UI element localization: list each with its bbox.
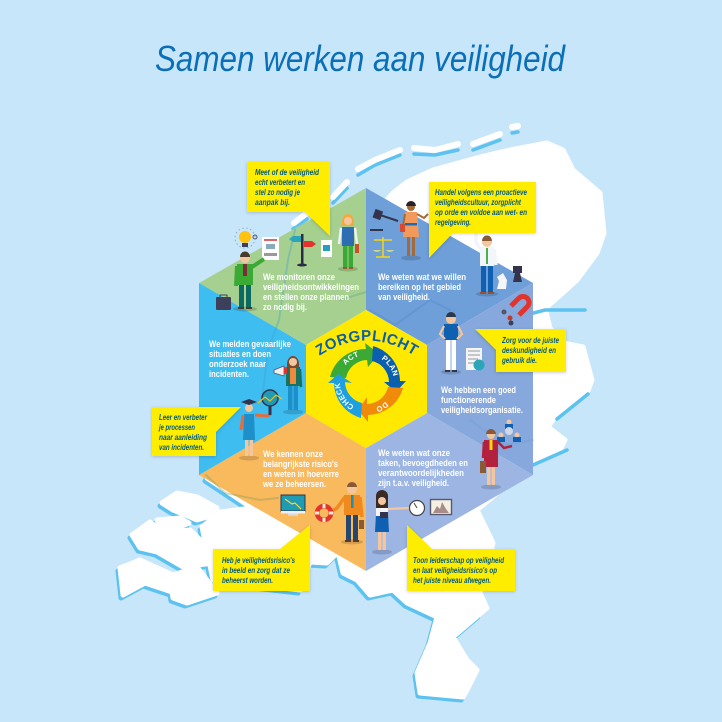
callout: expertise: deskundigheid en (502, 346, 556, 355)
labels on the cycle: PLAN (382, 355, 398, 376)
rivers seen through the hexagon (206, 230, 533, 500)
callout: measure: echt verbetert en (255, 178, 305, 187)
text: responsibilities: verantwoordelijkheden (378, 468, 464, 478)
text: responsibilities: zijn t.a.v. veiligheid. (378, 478, 449, 488)
text: responsibilities: taken, bevoegdheden en (378, 458, 468, 468)
person: man with glasses (440, 312, 462, 374)
labels on the cycle (334, 351, 398, 412)
person: graduate woman (239, 399, 271, 460)
labels on the cycle: ACT (343, 351, 358, 366)
icon: team (497, 420, 521, 442)
callout: expertise (475, 329, 566, 372)
callout: culture: op orde en voldoe aan wet- en (435, 208, 527, 217)
text: goals: van veiligheid. (378, 292, 430, 302)
icon: gauge (410, 500, 424, 516)
segment: responsibilities (lower blue) (366, 413, 533, 571)
callout: leadership: Toon leiderschap op veiligheid (413, 556, 505, 565)
text: organisation: veiligheidsorganisatie. (441, 405, 523, 415)
text: incidents: onderzoek naar (209, 359, 266, 369)
segment: organisation (right blue) (427, 283, 533, 475)
arrow: act (330, 343, 379, 378)
icons: gavel and scales (370, 209, 398, 257)
callout: risks: beheerst worden. (222, 576, 273, 585)
map of the Netherlands (118, 126, 604, 700)
callout: learn: van incidenten. (159, 443, 204, 452)
icon: megaphone (274, 366, 287, 376)
text: incidents: situaties en doen (209, 349, 271, 359)
callout: measure (247, 162, 330, 236)
callout: learn: Leer en verbeter (159, 413, 208, 422)
icon: area chart (430, 500, 452, 514)
person: woman with megaphone (283, 356, 303, 414)
person: man with raised arm (476, 231, 498, 296)
callout: risks (213, 525, 310, 591)
text: organisation: We hebben een goed (441, 385, 516, 395)
icon: lifebuoy (315, 504, 333, 522)
segment: goals (top blue) (366, 188, 533, 345)
callout: risks: Heb je veiligheidsrisico's (222, 556, 295, 565)
text: monitoring: veiligheidsontwikkelingen (263, 282, 359, 292)
text: risks (262, 449, 339, 489)
person: woman in navy skirt (372, 490, 410, 554)
infographic canvas (116, 44, 606, 702)
person: woman in red dress (480, 429, 512, 490)
arrow: plan (372, 346, 406, 392)
callout: risks: in beeld en zorg dat ze (222, 566, 290, 575)
icons: lightbulb, chart sheet, signpost, report (235, 228, 332, 266)
callout: culture: regelgeving. (435, 218, 471, 227)
text: goals (378, 272, 466, 302)
text: risks: en weten in hoeverre (263, 469, 339, 479)
labels on the cycle: DO (376, 402, 388, 412)
callout: expertise: Zorg voor de juiste (501, 336, 559, 345)
segment: incidents (sky blue) (199, 283, 306, 475)
text: responsibilities: We weten wat onze (378, 448, 450, 458)
text: incidents: We melden gevaarlijke (209, 339, 291, 349)
central PDCA hexagon (306, 310, 427, 448)
text: monitoring: en stellen onze plannen (263, 292, 349, 302)
heading: Zorgplicht: ZORGPLICHT (315, 330, 420, 356)
text: monitoring: zo nodig bij. (263, 302, 307, 312)
callout: leadership: het juiste niveau afwegen. (413, 576, 491, 585)
text: monitoring: We monitoren onze (263, 272, 335, 282)
text: organisation (441, 385, 523, 415)
person: woman with blue vest (338, 214, 359, 272)
person: woman in orange dress (400, 201, 428, 260)
icons: chess pieces (497, 266, 522, 289)
arc path for heading (300, 340, 434, 371)
segment: risks (orange) (199, 413, 366, 571)
text: risks: belangrijkste risico's (263, 459, 338, 469)
callout: leadership (407, 525, 515, 591)
text: responsibilities (378, 448, 468, 488)
text: organisation: functionerende (441, 395, 496, 405)
text: goals: We weten wat we willen (378, 272, 466, 282)
person: man in green suit (233, 252, 264, 312)
title: Samen werken aan veiligheid (155, 38, 566, 79)
arrow: do (358, 387, 403, 422)
callout: measure: Meet of de veiligheid (255, 168, 320, 177)
callout: culture: Handel volgens een proactieve (435, 188, 527, 197)
icon: monitor (281, 495, 305, 516)
text: incidents (209, 339, 291, 379)
callout: expertise: gebruik die. (501, 356, 537, 365)
callout: learn (152, 407, 241, 456)
text: goals: bereiken op het gebied (378, 282, 461, 292)
text: risks: we ze beheersen. (262, 479, 326, 489)
arrow: check (328, 374, 362, 418)
icon: magnifier with chart (258, 390, 282, 415)
callout: leadership: en laat veiligheidsrisico's op (413, 566, 497, 575)
callout: culture: veiligheidscultuur, zorgplicht (435, 198, 521, 207)
icon: briefcase (216, 295, 231, 310)
labels on the cycle: CHECK (334, 383, 353, 410)
segment: monitoring (green) (199, 188, 366, 345)
callout: measure: aanpak bij. (255, 198, 290, 207)
text: incidents: incidenten. (209, 369, 249, 379)
callout: learn: je processen (158, 423, 195, 432)
callout: measure: stel zo nodig je (255, 188, 300, 197)
text: monitoring (263, 272, 359, 312)
icon: magnet with people (502, 296, 529, 326)
icon: checked document (466, 348, 484, 370)
callout: culture (429, 182, 536, 258)
hexagon diagram (199, 188, 533, 571)
ring path for labels (340, 355, 394, 409)
text: risks: We kennen onze (263, 449, 323, 459)
person: man in orange jacket (332, 482, 364, 544)
callout: learn: naar aanleiding (159, 433, 207, 442)
